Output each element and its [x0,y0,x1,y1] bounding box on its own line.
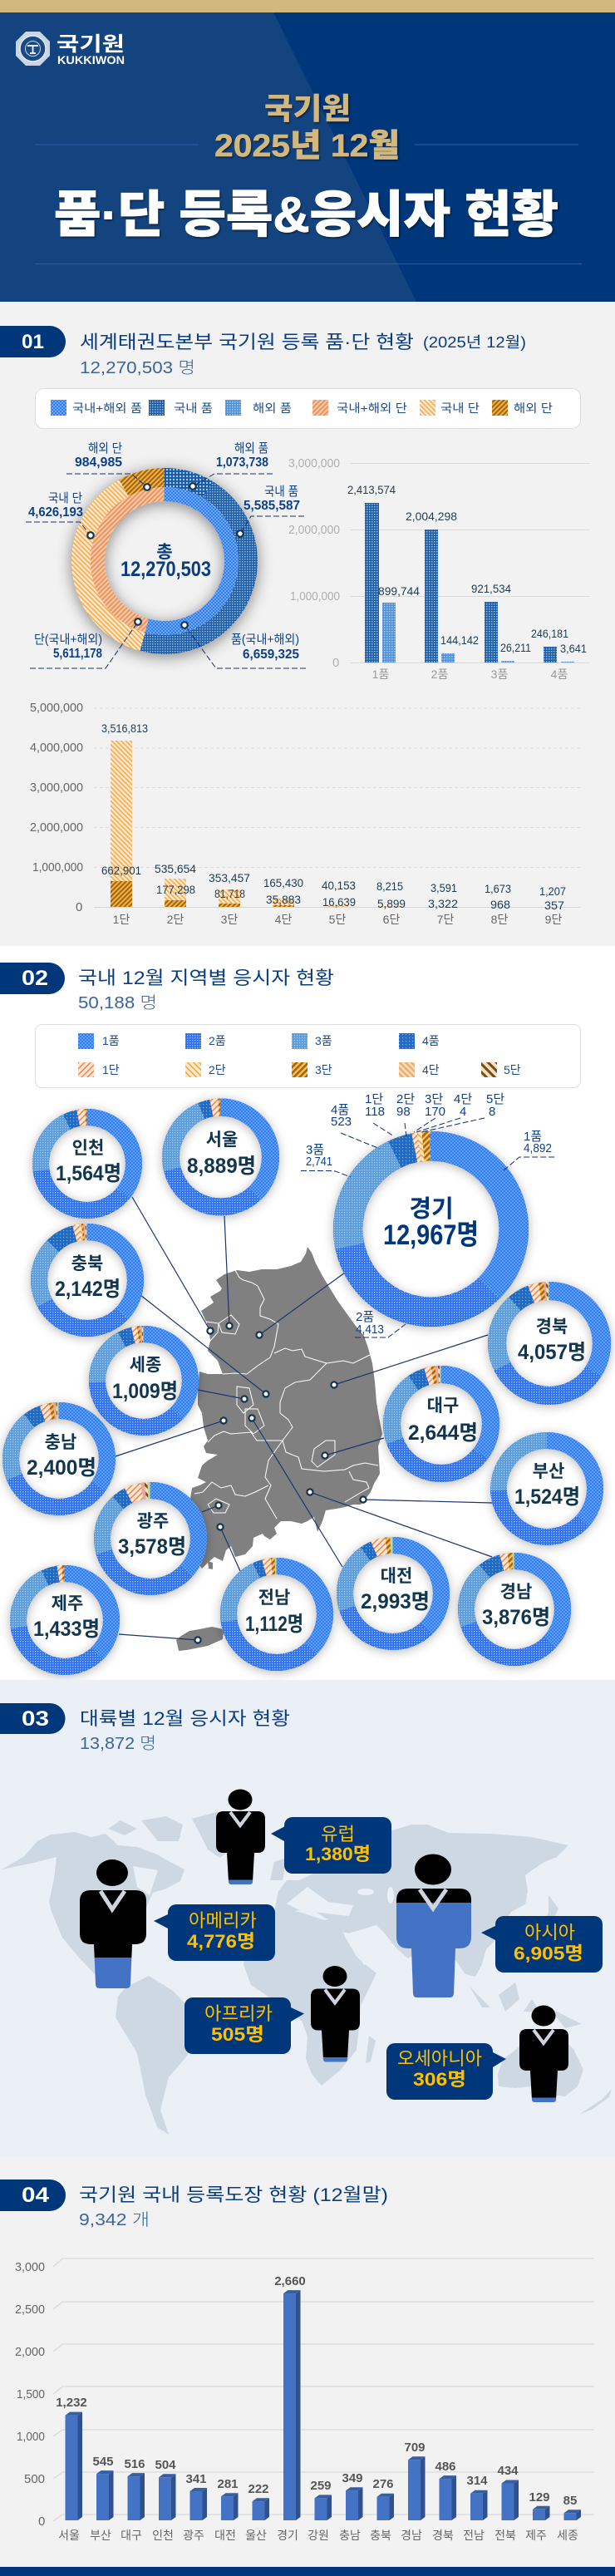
callouts: Gyeonggi breakdown: 2단 [396,1092,415,1106]
chart: dan bars: 5,000,000 [30,701,83,715]
bar value labels: 486 [435,2460,456,2474]
chart: dan bars: 2,000,000 [30,820,83,835]
callout: overseas poom: 해외 품 [234,441,268,456]
callout: overseas dan: 984,985 [75,456,122,470]
chart: dan bars: 40,153 [322,879,356,892]
callouts: Gyeonggi breakdown: 1단 [365,1092,383,1106]
bar value labels: 709 [404,2441,426,2455]
callout: Africa: 505명 [211,2024,264,2045]
chart: poom bars: 899,744 [378,584,420,598]
bar category labels: 부산 [90,2529,111,2542]
chart: poom bars: 246,181 [531,627,568,640]
chart: dan bars: 3,322 [428,897,458,910]
bar category labels: 서울 [58,2529,80,2542]
chart: poom bars: 26,211 [500,641,531,654]
bar category labels: 경기 [277,2529,298,2542]
donut: Jeju [10,1565,120,1675]
donut: Busan: 부산 [533,1462,564,1481]
chart: poom bars: 0 [332,656,339,670]
donut: Seoul [163,1099,279,1215]
callout: Asia [481,1916,603,1973]
callout: domestic poom [240,485,304,534]
callouts: Gyeonggi breakdown: 1품 [524,1130,542,1144]
bar category labels: 광주 [183,2529,204,2542]
legend: exam ranks: 2품 [209,1034,226,1047]
chart: dan bars: 662,901 [101,864,141,877]
callout: poom total [184,625,306,668]
callouts: Gyeonggi breakdown: 2,741 [306,1155,332,1169]
section 04 heading: 국기원 국내 등록도장 현황 (12월말) [79,2184,388,2205]
donut: Sejong: 세종 [130,1356,161,1375]
donut: Jeju: 제주 [52,1594,83,1613]
callouts: Gyeonggi breakdown: 523 [331,1115,352,1129]
person: America [80,1859,146,1988]
bar category labels: 경남 [401,2529,422,2542]
chart: registered dojang 3D bars: 2,500 [15,2303,45,2317]
footer bar [0,2567,615,2576]
chart: registered dojang 3D bars [15,2258,594,2542]
donut: Daegu [383,1366,499,1482]
section 01 heading: (2025년 12월) [423,334,526,351]
callouts: Gyeonggi breakdown: 4단 [454,1092,472,1106]
donut: Chungbuk: 2,142명 [55,1278,121,1301]
bar value labels: 2,660 [274,2274,306,2288]
callout: Oceania: 오세아니아 [397,2048,482,2069]
bar category labels: 인천 [152,2529,174,2542]
bar value labels [56,2274,577,2508]
donut: Daejeon [337,1537,450,1650]
title: date: 2025년 12월 [214,129,400,164]
donut: Gyeonggi: 경기 [409,1195,454,1223]
chart: poom bars: 1,000,000 [290,589,340,603]
donut: Jeonnam [220,1558,333,1671]
section 01 heading [0,326,526,377]
callout: dan total: 단(국내+해외) [34,633,102,647]
donut: Gyeonggi: 12,967명 [383,1219,479,1251]
donut: Daegu: 2,644명 [408,1421,478,1445]
chart: dan bars: 9단 [545,913,562,926]
callouts: Gyeonggi breakdown [301,1092,557,1337]
donut: Gyeongbuk: 4,057명 [518,1341,586,1364]
section 01 heading: 세계태권도본부 국기원 등록 품·단 현황 [80,332,414,352]
bar value labels: 545 [92,2455,114,2469]
chart: dan bars: 6단 [383,913,400,926]
callouts: Gyeonggi breakdown: 170 [425,1105,445,1119]
chart: poom bars: 2,413,574 [347,483,396,496]
chart: registered dojang 3D bars: 1,500 [17,2387,45,2401]
callout: Oceania: 306명 [413,2069,466,2090]
bar category labels: 대전 [214,2529,236,2542]
chart: poom bars: 4품 [551,667,568,681]
callouts: Gyeonggi breakdown: 118 [365,1105,385,1119]
callout: Europe: 1,380명 [305,1844,371,1864]
donut: Chungnam: 2,400명 [27,1456,96,1480]
donut: Chungbuk: 충북 [71,1254,103,1273]
donut: Gwangju [94,1482,207,1595]
donut: Sejong [89,1326,199,1436]
section 02 heading [0,963,334,1012]
bar value labels: 504 [155,2458,176,2472]
chart: dan bars: 177,298 [156,883,195,896]
bar category labels: 충남 [339,2529,361,2542]
chart: dan bars: 3,591 [430,881,457,894]
callout: domestic dan: 4,626,193 [28,505,83,520]
chart: dan bars: 7단 [437,913,454,926]
logo: Kukkiwon emblem and wordmark: KUKKIWON [57,53,125,66]
chart: dan bars: 35,883 [266,893,301,906]
person: Asia [396,1854,471,1997]
callouts: Gyeonggi breakdown: 98 [396,1105,411,1119]
legend: belt types: 국내 품 [174,401,213,415]
person: Europe [216,1789,265,1884]
chart: dan bars [30,701,581,926]
chart: total registration donut: 총 [156,543,173,562]
legend: belt types: 국내+해외 품 [72,401,142,415]
chart: registered dojang 3D bars: 2,000 [15,2345,45,2359]
callouts: Gyeonggi breakdown: 5단 [486,1092,504,1106]
bar value labels: 349 [342,2471,363,2485]
callout: Africa [184,1997,304,2054]
person: Oceania [519,2005,568,2102]
callout: Africa: 아프리카 [204,2003,273,2024]
chart: dan bars: 81,718 [214,887,245,900]
legend: exam ranks [35,1024,580,1087]
donut: Incheon: 인천 [72,1139,104,1158]
chart: registered dojang 3D bars: 500 [24,2472,45,2486]
callout: Oceania [386,2043,506,2100]
header banner [0,0,615,302]
legend: exam ranks: 4품 [422,1034,440,1047]
callout: America [154,1904,275,1961]
bar category labels: 충북 [370,2529,391,2542]
bar category labels: 울산 [245,2529,267,2542]
chart: dan bars: 357 [544,899,564,912]
section 02 heading: 02 [22,967,48,990]
donut: Incheon: 1,564명 [56,1162,121,1185]
callout: poom total: 6,659,325 [243,648,299,662]
callout: domestic dan [26,491,91,535]
callout: Asia: 6,905명 [514,1943,583,1963]
map: South Korea [176,1247,382,1651]
callouts: Gyeonggi breakdown: 4,413 [356,1322,384,1337]
map: Jeju island [176,1627,224,1651]
chart: poom bars: 3,641 [560,642,587,655]
donut: Busan [490,1432,603,1545]
donut: Gwangju: 3,578명 [118,1535,186,1559]
donut: Daegu: 대구 [427,1396,459,1416]
donut marker dots [87,483,244,628]
callouts: Gyeonggi breakdown: 4,892 [524,1141,552,1155]
chart: poom bars: 2,000,000 [288,523,340,537]
bar value labels: 129 [529,2490,550,2505]
callouts: Gyeonggi breakdown: 3품 [306,1143,324,1157]
legend: belt types: 해외 단 [514,401,553,415]
callout: America: 아메리카 [189,1910,257,1931]
donut: Gyeongbuk: 경북 [536,1318,568,1337]
section 02 heading: 국내 12월 지역별 응시자 현황 [78,968,334,988]
section 03 heading [0,1703,290,1753]
donut: Chungbuk [31,1224,144,1337]
chart: dan bars: 8단 [491,913,508,926]
chart: dan bars: 3,000,000 [30,781,83,795]
donut: Seoul: 서울 [206,1130,238,1150]
chart: dan bars: 165,430 [263,876,303,889]
callout: poom total: 품(국내+해외) [231,633,299,647]
chart: poom bars: 144,142 [440,633,479,647]
legend: exam ranks: 2단 [209,1063,226,1076]
section 04 heading: 9,342 개 [79,2210,150,2229]
callouts: Gyeonggi breakdown: 8 [489,1105,495,1119]
chart: registered dojang 3D bars: 1,000 [17,2430,45,2444]
section 03 heading: 03 [22,1707,49,1731]
callout: America: 4,776명 [187,1931,255,1952]
section 04 heading: 04 [22,2184,49,2207]
chart: poom bars: 3,000,000 [288,456,340,470]
bar value labels: 85 [563,2494,577,2508]
legend: exam ranks: 1품 [102,1034,120,1047]
person: Africa [311,1966,360,2061]
chart: dan bars: 5,899 [377,897,406,910]
legend: exam ranks: 3단 [315,1063,332,1076]
chart: poom bars: 2품 [431,667,448,681]
donut: Daejeon: 2,993명 [361,1590,430,1613]
legend: belt types [35,389,580,429]
legend: belt types: 국내+해외 단 [337,401,407,415]
chart: total registration donut [26,441,306,668]
chart: dan bars: 535,654 [155,862,196,875]
logo: Kukkiwon emblem and wordmark: 국기원 [57,33,125,56]
callouts: Gyeonggi breakdown: 4품 [331,1103,349,1117]
chart: dan bars: 1,000,000 [32,860,83,874]
section 01 heading: 12,270,503 명 [80,358,195,377]
section 04 heading [0,2180,388,2229]
callout: Europe [271,1817,391,1874]
leader lines from regions to map [116,1197,492,1640]
chart: poom bars [288,456,589,681]
world map [2,1810,612,2135]
chart: registered dojang 3D bars: 3,000 [15,2260,45,2274]
chart: poom bars: 921,534 [471,582,511,595]
chart: dan bars: 1단 [113,913,130,926]
donut: Gyeongnam: 경남 [500,1583,532,1602]
donut: Gwangju: 광주 [137,1512,169,1531]
bar value labels: 1,232 [56,2396,87,2410]
chart: dan bars: 4단 [275,913,292,926]
chart: dan bars: 5단 [329,913,346,926]
callout: overseas dan [66,441,147,487]
chart: dan bars: 3단 [221,913,238,926]
map location dots [194,1322,367,1643]
bar category labels: 대구 [121,2529,142,2542]
donut: Sejong: 1,009명 [112,1380,178,1403]
callout: Europe: 유럽 [321,1824,355,1845]
chart: dan bars: 0 [76,900,82,914]
chart: poom bars: 3품 [491,667,508,681]
callout: Asia: 아시아 [524,1922,575,1943]
callouts: Gyeonggi breakdown: 4 [460,1105,466,1119]
logo: Kukkiwon emblem and wordmark [16,32,125,66]
donut: Seoul: 8,889명 [187,1155,256,1178]
legend: exam ranks: 4단 [422,1063,440,1076]
bar value labels: 276 [372,2477,394,2491]
section 03 heading: 13,872 명 [80,1734,156,1753]
bar category labels: 제주 [525,2529,547,2542]
callout: dan total: 5,611,178 [53,647,102,661]
callout: overseas poom: 1,073,738 [216,456,268,470]
callout: domestic poom: 5,585,587 [244,499,300,513]
bars [65,2290,581,2520]
legend: exam ranks: 1단 [102,1063,120,1076]
callouts: Gyeonggi breakdown: 3단 [425,1092,443,1106]
donut: Daejeon: 대전 [381,1567,412,1586]
donut: Gyeongbuk [488,1282,611,1405]
chart: registered dojang 3D bars: 0 [38,2514,45,2529]
bar category labels: 경북 [432,2529,454,2542]
bar category labels: 전북 [494,2529,516,2542]
legend: exam ranks: 3품 [315,1034,332,1047]
bar category labels: 강원 [308,2529,329,2542]
section 01 heading: 01 [22,331,44,353]
section 03 background [0,1680,615,2156]
donut: Chungnam: 충남 [45,1433,76,1452]
title: organisation name: 국기원 [264,91,351,126]
section 03 heading: 대륙별 12월 응시자 현황 [80,1708,290,1729]
legend: belt types: 해외 품 [253,401,292,415]
section 02 heading: 50,188 명 [78,993,157,1012]
callout: domestic poom: 국내 품 [264,485,298,499]
title: main heading: 품·단 등록&응시자 현황 [54,187,558,243]
chart: poom bars: 1품 [372,667,389,681]
donut: Jeonnam: 1,112명 [245,1613,303,1636]
callout: domestic dan: 국내 단 [48,491,82,505]
donut: Chungnam [2,1402,116,1515]
callout: dan total [30,622,138,668]
donut: Gyeongnam: 3,876명 [482,1606,550,1629]
bar value labels: 259 [310,2479,332,2493]
chart: dan bars: 2단 [167,913,184,926]
chart: dan bars: 1,673 [485,882,511,895]
callouts: Gyeonggi breakdown: 2품 [356,1310,374,1324]
chart: dan bars: 4,000,000 [30,741,83,755]
callout: overseas poom [193,441,273,486]
bar value labels: 516 [124,2457,145,2471]
chart: poom bars: 2,004,298 [406,510,457,523]
bar category labels: 전남 [463,2529,485,2542]
bar value labels: 314 [466,2474,488,2488]
donut: Jeonnam: 전남 [258,1588,290,1608]
chart: total registration donut: 12,270,503 [121,558,211,581]
donut: Busan: 1,524명 [514,1485,580,1509]
donut: Gyeonggi [301,1092,557,1337]
bar value labels: 222 [248,2482,269,2496]
chart: dan bars: 353,457 [209,871,250,884]
donut: Incheon [32,1109,142,1219]
bar value labels: 434 [497,2464,519,2478]
donut: Gyeongnam [458,1553,571,1666]
chart: dan bars: 16,639 [322,895,356,909]
bar category labels: 세종 [557,2529,578,2542]
bar value labels: 341 [185,2472,207,2486]
donut: Jeju: 1,433명 [33,1618,100,1641]
legend: belt types: 국내 단 [440,401,480,415]
legend: exam ranks: 5단 [504,1063,521,1076]
callout: overseas dan: 해외 단 [88,441,122,456]
bar category labels [58,2529,578,2542]
chart: dan bars: 1,207 [539,884,566,898]
chart: dan bars: 8,215 [376,879,403,893]
bar value labels: 281 [217,2477,239,2491]
chart: dan bars: 3,516,813 [101,722,148,735]
chart: dan bars: 968 [490,898,510,911]
section 02 background [0,946,615,1680]
